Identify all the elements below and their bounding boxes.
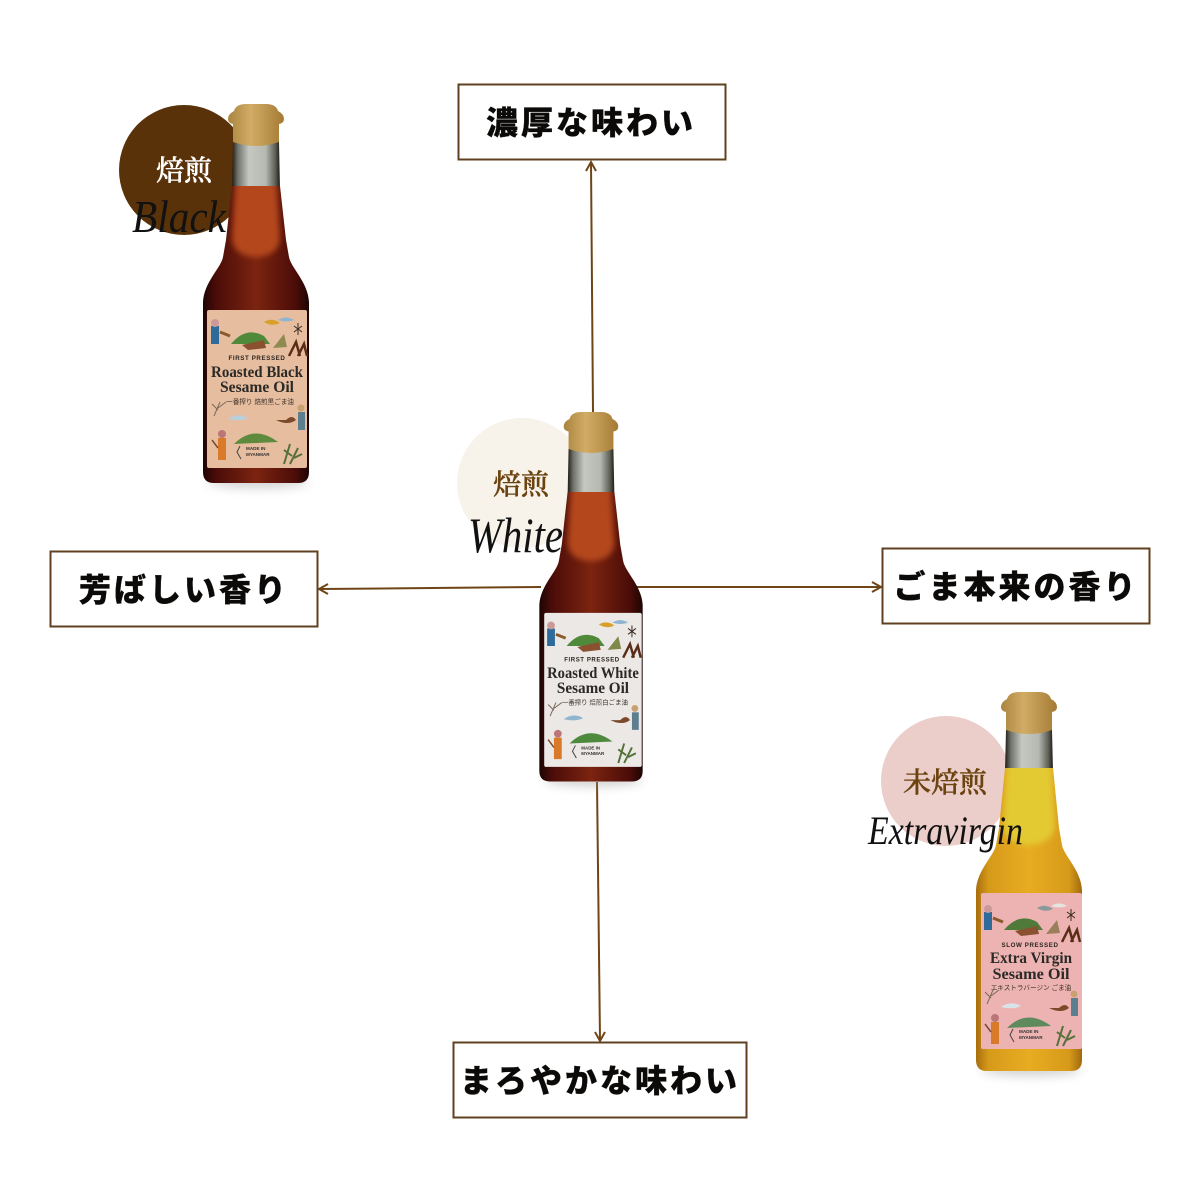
label illustrations: Roasted Black <box>211 364 303 381</box>
badge circle: roasted black <box>119 105 249 235</box>
heading box: natural sesame aroma: ごま本来の香り <box>893 569 1139 605</box>
arrow: right to natural sesame aroma <box>630 582 881 592</box>
label illustrations: FIRST PRESSED <box>564 658 620 664</box>
label illustrations: 一番搾り 焙煎黒ごま油 <box>226 397 294 406</box>
script word: Black: Black <box>132 191 227 242</box>
label illustrations <box>984 904 1080 1046</box>
badge circle: unroasted: 未焙煎 <box>903 767 988 799</box>
heading box: rich taste: 濃厚な味わい <box>486 105 696 141</box>
label illustrations: 一番搾り 焙煎白ごま油 <box>562 697 628 706</box>
label illustrations: MADE IN <box>1019 1029 1039 1034</box>
label illustrations: エキストラバージン ごま油 <box>991 983 1072 992</box>
label illustrations: MADE IN <box>246 446 266 451</box>
heading box: roasted aroma: 芳ばしい香り <box>79 572 289 608</box>
heading box: roasted aroma <box>50 552 318 626</box>
label illustrations: Sesame Oil <box>220 379 295 396</box>
heading box: natural sesame aroma <box>882 548 1150 624</box>
label illustrations: MYANMAR <box>581 751 605 756</box>
label illustrations: Sesame Oil <box>557 680 630 697</box>
label illustrations: Sesame Oil <box>992 966 1070 983</box>
bottle: roasted white sesame oil <box>539 412 643 786</box>
arrow: down to mellow taste <box>595 782 605 1041</box>
badge circle: roasted white: 焙煎 <box>493 469 550 501</box>
heading box: rich taste <box>458 84 726 160</box>
label illustrations: MADE IN <box>581 745 600 750</box>
heading box: mellow taste <box>454 1042 746 1118</box>
arrow: left to roasted aroma <box>319 584 541 594</box>
label illustrations: SLOW PRESSED <box>1001 942 1059 949</box>
heading box: mellow taste: まろやかな味わい <box>460 1063 740 1099</box>
label illustrations: MYANMAR <box>246 452 270 457</box>
label illustrations: Roasted White <box>547 665 639 682</box>
label illustrations: FIRST PRESSED <box>229 355 285 362</box>
badge circle: unroasted <box>881 716 1011 846</box>
label illustrations <box>211 318 307 464</box>
label illustrations: MYANMAR <box>1019 1035 1043 1040</box>
badge circle: roasted black: 焙煎 <box>156 155 213 187</box>
script word: White: White <box>468 507 563 563</box>
arrow: up to rich taste <box>586 162 596 412</box>
bottle: extra virgin sesame oil <box>976 692 1082 1076</box>
script word: Extravirgin: Extravirgin <box>867 808 1023 853</box>
badge circle: roasted white <box>457 418 587 548</box>
label illustrations <box>547 620 641 763</box>
bottle: roasted black sesame oil <box>203 104 309 488</box>
label illustrations: Extra Virgin <box>990 950 1072 967</box>
